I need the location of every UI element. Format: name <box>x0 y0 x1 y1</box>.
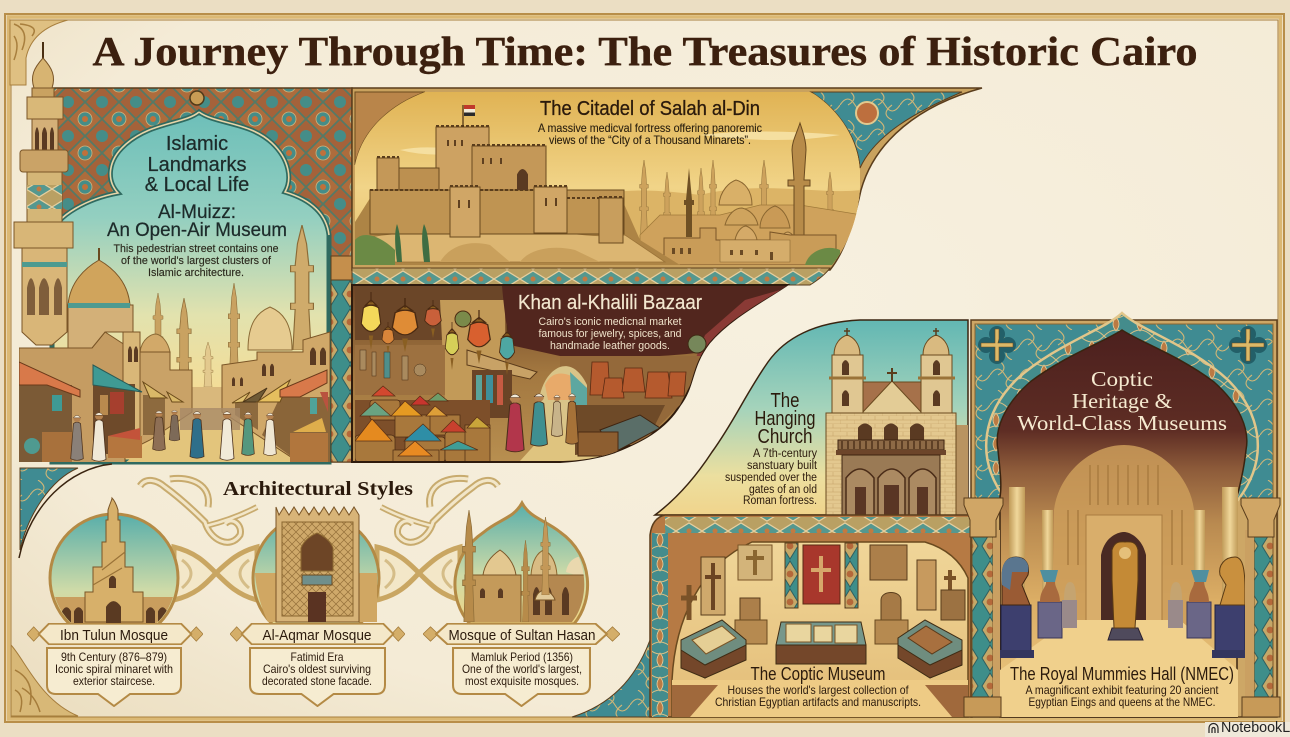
case manuscripts <box>786 624 857 643</box>
case left base <box>681 645 746 678</box>
pedestal base right <box>1212 650 1245 658</box>
medallion: Ibn Tulun Mosque <box>50 498 180 642</box>
title banner <box>502 286 790 357</box>
dome drum <box>68 305 133 348</box>
minarets <box>152 283 240 370</box>
description: Christian Egyptian artifacts and manuscripts. <box>715 695 921 709</box>
octagon shaft <box>22 248 67 345</box>
description: sanstuary built <box>747 460 818 472</box>
pedestal small left <box>1062 600 1077 628</box>
upper balcony <box>27 97 63 119</box>
second keep <box>472 146 546 194</box>
body text <box>114 243 278 279</box>
pale minarets <box>640 160 834 238</box>
shaft slits <box>35 127 54 150</box>
rock base <box>374 234 666 262</box>
goods shelf <box>575 405 665 455</box>
minaret right <box>541 517 550 595</box>
bust small right <box>1170 582 1182 600</box>
sky <box>655 320 968 515</box>
left capital <box>964 498 1003 537</box>
sarcophagus face <box>1119 547 1131 559</box>
spandrel teal background <box>975 324 1273 499</box>
porch arches <box>846 469 936 515</box>
tall minaret <box>14 42 73 345</box>
rock shading <box>440 243 600 262</box>
ground street <box>126 421 290 462</box>
arched sky <box>52 112 329 462</box>
lower balcony <box>14 222 73 248</box>
tall minaret left <box>463 510 475 622</box>
description: famous for jewelry, spices, and <box>538 328 682 340</box>
body text: Islamic architecture. <box>148 267 244 279</box>
baskets <box>355 400 490 462</box>
heading: Architectural Styles <box>223 478 413 500</box>
description: Roman fortress. <box>743 495 817 507</box>
text box: Al-Aqmar: Fatimid Era <box>290 650 344 664</box>
teal corner: bottom right <box>572 640 650 717</box>
floor <box>672 680 968 717</box>
shaft <box>32 119 58 151</box>
side column ornament <box>331 280 352 462</box>
description <box>538 121 762 147</box>
keep tower <box>436 127 489 192</box>
gold left spandrel <box>355 92 425 165</box>
arcade wall <box>50 597 180 624</box>
labelled plaque: Ibn Tulun <box>27 624 203 644</box>
tower cornices <box>829 376 955 380</box>
teal strips <box>785 543 798 608</box>
left column frame <box>993 530 1000 717</box>
minaret crescent <box>42 42 44 60</box>
medallion ring <box>455 503 588 624</box>
wall panel right <box>917 560 936 610</box>
tower slice <box>123 332 140 444</box>
exhibits <box>681 543 965 678</box>
minaret centre <box>522 540 529 622</box>
subheading: Al-Muizz <box>107 202 287 241</box>
dome <box>483 550 516 575</box>
tower crosses <box>844 328 939 336</box>
teal corner: top left <box>20 468 78 550</box>
pedestal mid right <box>1187 602 1211 638</box>
description: Cairo's iconic medicnal market <box>538 316 682 328</box>
corner ornament: top left <box>10 20 68 85</box>
dome pale <box>531 550 557 575</box>
minaret window <box>109 576 116 588</box>
text box: Ibn Tulun: 9th Century (876–879) <box>61 650 167 664</box>
small dome <box>140 334 170 352</box>
dome finial <box>98 248 100 260</box>
description: handmade leather goods. <box>550 340 670 352</box>
text box: Ibn Tulun: Iconic spiral minaret with <box>55 662 173 676</box>
text box: Sultan Hasan: most exquisite mosques. <box>465 674 579 688</box>
heading: Islamic Landmarks: Landmarks <box>148 154 246 176</box>
labelled plaque: Al-Aqmar <box>230 624 405 644</box>
right dome <box>248 307 292 350</box>
red tapestry <box>803 545 840 604</box>
description <box>725 448 818 507</box>
warm lit wall <box>440 300 505 400</box>
middle balcony <box>20 150 68 172</box>
left block <box>19 332 125 463</box>
description: A 7th-century <box>753 448 817 460</box>
minaret door <box>106 601 121 623</box>
stalls <box>19 385 72 463</box>
relics cluster <box>941 590 965 620</box>
text box: Sultan Hasan: One of the world's largest, <box>462 662 582 676</box>
arch spandrel pattern <box>52 88 352 462</box>
band pattern <box>27 185 62 209</box>
balcony rail <box>838 440 944 450</box>
facade <box>276 507 359 622</box>
spandrel cross: left <box>978 326 1016 364</box>
big left dome <box>68 260 130 305</box>
shopkeeper figures <box>506 394 524 452</box>
clouds <box>400 132 840 155</box>
bust small left <box>1064 582 1076 600</box>
main right minaret <box>788 123 810 235</box>
pedestal large right <box>1215 605 1245 652</box>
roof side <box>862 382 922 413</box>
heading <box>754 390 816 448</box>
stone relief <box>870 545 907 580</box>
heading: The <box>770 390 800 412</box>
scene backdrop <box>352 285 787 462</box>
frame block <box>971 320 1277 717</box>
heading: The Coptic Museum <box>750 664 886 684</box>
pedestal small right <box>1168 600 1183 628</box>
medallion ring <box>50 514 178 642</box>
body text: of the world's largest clusters of <box>121 255 272 267</box>
text box: Sultan Hasan <box>453 648 590 706</box>
title: A Journey Through Time: The Treasures of Historic Cairo <box>92 28 1198 74</box>
lanterns <box>361 292 514 375</box>
stone stele <box>881 592 901 622</box>
fortress hill <box>355 195 680 265</box>
description <box>1026 683 1219 709</box>
body text: This pedestrian street contains one <box>114 243 278 255</box>
crown right <box>1191 570 1209 582</box>
main wall <box>826 413 956 515</box>
heading: The Citadel of Salah al-Din <box>540 98 760 120</box>
case right scrolls <box>908 626 952 654</box>
city mass <box>640 204 856 256</box>
medallion: Al-Aqmar Mosque <box>253 507 379 642</box>
left strip <box>652 533 668 717</box>
corner: bottom left <box>11 645 78 716</box>
crates <box>578 432 618 456</box>
heading: Church <box>758 426 812 448</box>
description: Egyptian Eings and queens at the NMEC. <box>1028 695 1216 709</box>
medallion ring <box>253 514 379 642</box>
portal surround <box>1086 515 1162 645</box>
spandrel rosette <box>856 102 878 124</box>
heading: Islamic Landmarks <box>145 133 249 196</box>
hieroglyph panel <box>1068 465 1182 565</box>
description: A magnificant exhibit featuring 20 ancient <box>1026 683 1219 697</box>
small dome <box>535 590 555 600</box>
front block <box>465 575 521 623</box>
case left <box>681 620 746 678</box>
spandrel cross: right <box>1229 326 1267 364</box>
sarcophagus body <box>1112 542 1138 628</box>
portal niche <box>301 533 333 571</box>
stele pedestal <box>875 620 908 644</box>
back wall <box>956 425 970 515</box>
floor <box>1000 620 1238 717</box>
heading: Coptic <box>1091 367 1153 391</box>
right goods wall <box>695 290 780 360</box>
windows <box>128 346 326 386</box>
arch keystone <box>190 91 204 105</box>
busts <box>1000 557 1245 658</box>
olive jar <box>688 335 706 353</box>
case right base <box>898 645 962 678</box>
people <box>71 410 276 461</box>
case left book <box>692 626 736 654</box>
top band <box>665 517 970 533</box>
text box: Ibn Tulun: exterior staircese. <box>73 674 155 688</box>
right column strip <box>1254 537 1273 697</box>
alley arch <box>540 366 587 455</box>
gable cross <box>887 368 897 382</box>
right base <box>1242 697 1280 717</box>
sarcophagus base <box>1108 628 1143 640</box>
arch inner trim <box>52 112 329 235</box>
left tower <box>377 158 399 193</box>
spice basket row <box>355 400 490 462</box>
upper shaft <box>32 88 54 97</box>
heading: World-Class Museums <box>1017 411 1227 435</box>
heading: Islamic Landmarks: Islamic <box>166 133 228 155</box>
subheading: Al-Muizz: Al-Muizz: <box>158 202 236 223</box>
right column frame <box>1245 530 1254 717</box>
knot link: left <box>174 547 257 600</box>
subheading: Al-Muizz: An Open-Air Museum <box>107 220 287 241</box>
labelled plaque: Sultan Hasan: Mosque of Sultan Hasan <box>448 627 596 644</box>
balcony floor <box>836 450 946 455</box>
inscription <box>302 575 332 585</box>
bust large right <box>1220 557 1245 605</box>
statue pedestal <box>735 620 767 644</box>
gallery wall <box>672 542 968 717</box>
arch outer band <box>986 313 1258 500</box>
panel frame <box>352 88 982 270</box>
heading <box>1017 367 1227 435</box>
gate arch <box>517 169 528 190</box>
statue <box>740 598 760 620</box>
description <box>538 316 682 352</box>
wall towers <box>450 187 480 237</box>
text box: Ibn Tulun <box>47 648 181 706</box>
right block <box>527 575 587 623</box>
spiral stair <box>93 552 125 585</box>
shaft niches <box>27 278 62 315</box>
dark minaret <box>684 168 694 237</box>
small cross right <box>944 570 956 595</box>
wood cross panel <box>701 557 725 615</box>
heading: Hanging <box>754 408 816 430</box>
description: gates of an old <box>749 484 817 496</box>
pedestal base left <box>1000 650 1034 658</box>
awnings <box>19 362 80 397</box>
panel: Coptic Heritage and the Royal Mummies Hall <box>964 313 1280 717</box>
sarcophagus <box>1108 542 1143 640</box>
bags <box>590 362 686 398</box>
subheading: The Royal Mummies Hall (NMEC) <box>1010 664 1234 684</box>
labelled plaque: Sultan Hasan <box>423 624 620 644</box>
scroll ornament: right <box>381 478 498 542</box>
foreground city <box>664 228 836 265</box>
case right <box>898 620 962 678</box>
tower domes <box>834 335 949 355</box>
panel: Islamic landmarks and local life <box>14 42 352 463</box>
arched windows <box>858 423 924 440</box>
panel: The Hanging Church <box>655 320 970 515</box>
trees <box>355 224 840 265</box>
description: views of the “City of a Thousand Minarets”. <box>549 133 751 147</box>
scroll ornament: left <box>140 478 257 542</box>
right buildings <box>222 332 330 463</box>
spice cones <box>355 386 490 456</box>
path <box>520 430 625 461</box>
frame <box>650 515 972 717</box>
description: Houses the world's largest collection of <box>728 683 909 697</box>
far pale minaret <box>203 342 213 387</box>
bust mid left <box>1040 582 1060 602</box>
decorative band between panels <box>352 268 830 285</box>
right capital <box>1241 498 1280 537</box>
dome trim <box>68 303 130 308</box>
crowd <box>180 408 240 430</box>
labelled plaque: Al-Aqmar: Al-Aqmar Mosque <box>262 627 372 644</box>
alley colours <box>545 374 575 400</box>
left tower <box>832 355 863 413</box>
large domes <box>718 180 793 240</box>
square ornament <box>331 256 352 280</box>
pedestal large left <box>1001 605 1031 652</box>
golden sky <box>355 92 860 265</box>
carpets <box>672 685 968 717</box>
standing cross <box>681 585 697 620</box>
gable front <box>862 381 922 413</box>
crown <box>1040 570 1058 582</box>
bust mid right <box>1189 582 1209 602</box>
arches <box>480 587 569 615</box>
shaft trim <box>22 262 67 267</box>
hanging tools <box>360 350 426 380</box>
mid block <box>400 168 440 190</box>
battlements <box>370 126 623 198</box>
carved panel <box>282 522 353 616</box>
right tower <box>921 355 952 413</box>
door <box>308 592 326 622</box>
goods <box>52 395 62 411</box>
panel: Citadel of Salah al-Din <box>352 88 982 270</box>
fortress windows <box>447 140 557 208</box>
upper dark wall <box>355 286 505 340</box>
porch <box>842 455 940 515</box>
hanging cloths <box>472 370 512 418</box>
text box: Al-Aqmar: Cairo's oldest surviving <box>263 662 371 676</box>
knot link: right <box>377 547 460 600</box>
pedestal mid left <box>1038 602 1062 638</box>
flag <box>462 105 464 127</box>
case center base <box>776 645 866 664</box>
panel: The Coptic Museum <box>650 515 972 717</box>
balusters <box>842 441 938 449</box>
left shop <box>355 345 445 395</box>
lower right brown <box>560 356 705 445</box>
heading: Islamic Landmarks: & Local Life <box>145 174 249 196</box>
heading: Heritage & <box>1072 389 1172 413</box>
street scene <box>19 225 330 463</box>
curved divider <box>19 464 112 558</box>
dark doorway <box>1101 532 1146 625</box>
far dome right <box>566 555 590 580</box>
porch doors <box>855 485 928 515</box>
tower windows <box>842 360 940 406</box>
parchment cross <box>738 545 772 580</box>
distant gate <box>192 387 222 408</box>
left base <box>964 697 1001 717</box>
minaret bulb <box>32 58 54 88</box>
spiral minaret <box>85 498 143 622</box>
case center <box>776 622 866 662</box>
description: suspended over the <box>725 472 817 484</box>
text box: Sultan Hasan: Mamluk Period (1356) <box>471 650 573 664</box>
description <box>715 683 921 709</box>
teal band <box>27 172 62 222</box>
far hills <box>624 188 860 258</box>
awning <box>467 350 537 379</box>
headdress <box>1002 557 1028 590</box>
teal spandrel <box>811 92 962 168</box>
bust large left <box>1002 557 1030 605</box>
inner columns <box>1009 487 1238 617</box>
right minaret <box>291 225 313 350</box>
labelled plaque: Ibn Tulun: Ibn Tulun Mosque <box>60 627 168 644</box>
description: A massive medicval fortress offering panoremic <box>538 121 762 135</box>
inner arch wall <box>1054 445 1194 700</box>
panel: Architectural Styles <box>11 464 650 717</box>
hall interior <box>997 330 1247 717</box>
curtain wall <box>370 190 624 234</box>
medallion: Sultan Hasan <box>455 503 590 624</box>
text box: Al-Aqmar <box>250 648 385 706</box>
text box: Al-Aqmar: decorated stone facade. <box>262 674 372 688</box>
side walls <box>255 573 377 622</box>
heading: Khan al-Khalili Bazaar <box>518 292 702 314</box>
left column strip <box>972 537 993 697</box>
receding left buildings <box>140 352 192 445</box>
flag cloth <box>464 105 475 116</box>
panel: Khan al-Khalili Bazaar <box>352 285 790 462</box>
